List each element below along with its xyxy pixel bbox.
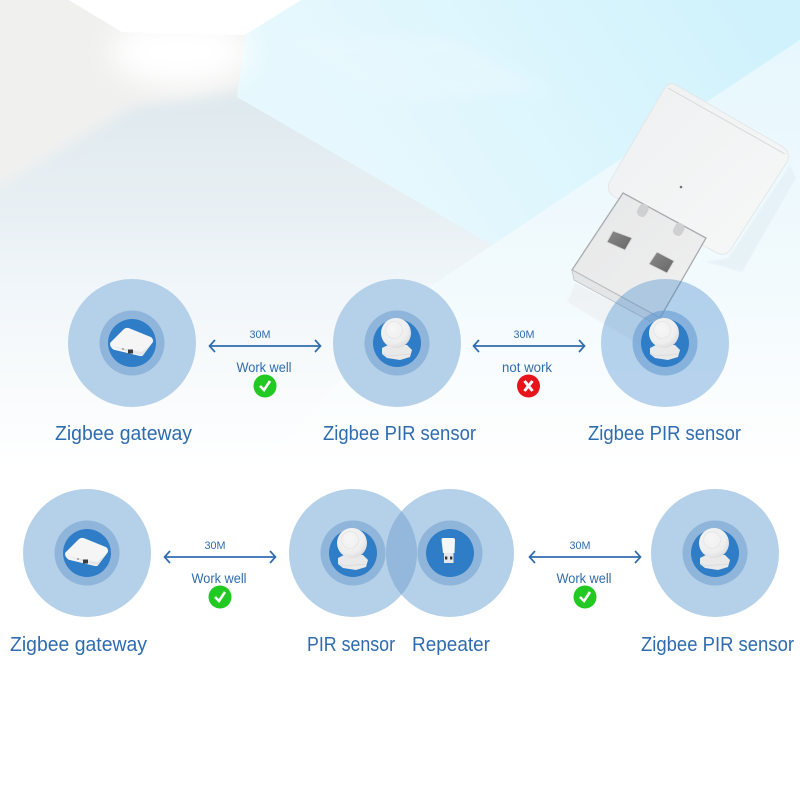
distance label: 30M bbox=[570, 540, 590, 552]
arrow: 30M link 3 bbox=[164, 551, 276, 563]
product: USB repeater dongle bbox=[567, 84, 796, 345]
arrow: 30M link 1 bbox=[210, 340, 320, 352]
distance label: 30M bbox=[514, 329, 534, 341]
label: Zigbee gateway: Zigbee gateway bbox=[10, 634, 147, 656]
icon: green check bbox=[574, 586, 596, 608]
label: PIR sensor: PIR sensor bbox=[307, 634, 395, 656]
status text: not work: not work bbox=[502, 360, 552, 375]
icon: green check bbox=[208, 586, 232, 608]
distance label: 30M bbox=[250, 329, 270, 341]
icon: green check bbox=[254, 374, 276, 398]
label: Zigbee PIR sensor: Zigbee PIR sensor bbox=[323, 423, 476, 445]
distance label: 30M bbox=[204, 540, 226, 552]
status text: Work well: Work well bbox=[236, 360, 292, 375]
node: Zigbee gateway, row 1 bbox=[68, 279, 196, 407]
label: Repeater: Repeater bbox=[412, 634, 490, 656]
arrow: 30M link 2 bbox=[474, 340, 584, 352]
label: Zigbee PIR sensor: Zigbee PIR sensor bbox=[588, 423, 741, 445]
node: PIR sensor and repeater overlap bbox=[289, 489, 514, 617]
label: Zigbee gateway: Zigbee gateway bbox=[55, 423, 192, 445]
icon: red cross bbox=[517, 374, 540, 398]
node: Zigbee PIR sensor, row 1 right bbox=[601, 279, 729, 407]
arrow: 30M link 4 bbox=[530, 551, 640, 563]
node: Zigbee PIR sensor, row 1 middle bbox=[333, 279, 461, 407]
node: Zigbee PIR sensor, row 2 right bbox=[651, 489, 779, 617]
node: Zigbee gateway, row 2 bbox=[23, 489, 151, 617]
status text: Work well: Work well bbox=[556, 571, 612, 586]
status text: Work well: Work well bbox=[192, 571, 246, 586]
